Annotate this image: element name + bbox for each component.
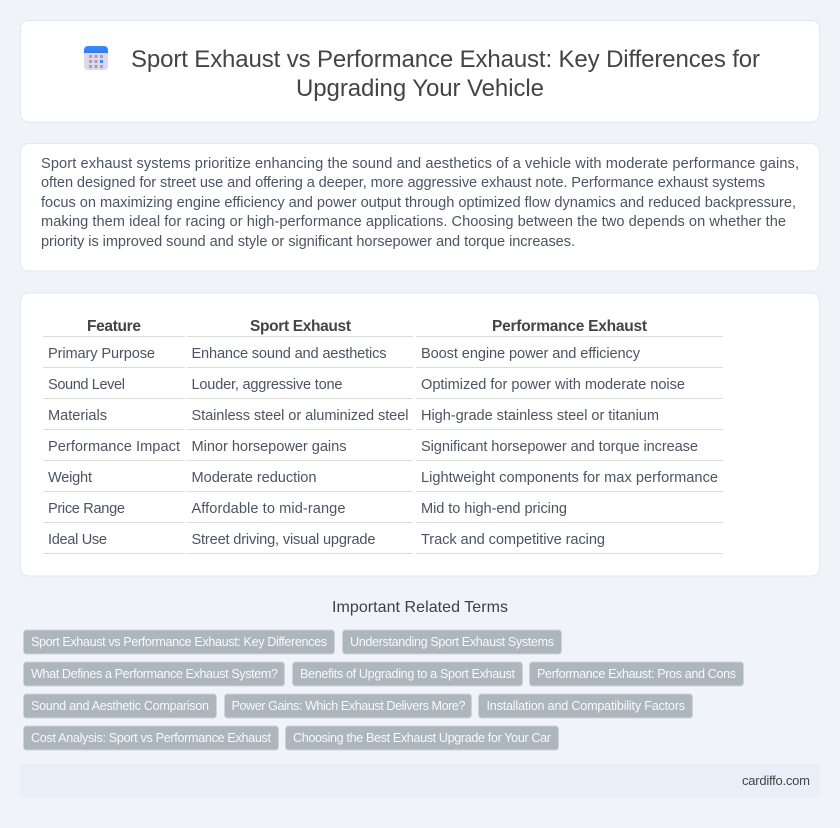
- chip: Choosing the Best Exhaust Upgrade for Your Car: [293, 731, 551, 745]
- row: performance impact: [48, 439, 698, 455]
- row: sound level: Louder, aggressive tone: [192, 377, 342, 393]
- row: sound level: Sound Level: [48, 377, 125, 393]
- row: materials: [48, 408, 659, 424]
- chip: Sound and Aesthetic Comparison: [31, 699, 209, 713]
- panel: comparison table: [20, 293, 820, 576]
- row: ideal use: Ideal Use: [48, 532, 107, 548]
- text block: description: focus on maximizing engine efficiency and power output through optimized flow dynamics and reduced backpressure,: [41, 195, 796, 211]
- chip: Sport Exhaust vs Performance Exhaust: Key Differences: [31, 635, 327, 649]
- row: weight: Lightweight components for max performance: [421, 470, 718, 486]
- chip: Power Gains: Which Exhaust Delivers More?: [232, 699, 466, 713]
- panel: related term chips: [24, 630, 744, 750]
- row: price range: [48, 501, 567, 517]
- row: performance impact: Minor horsepower gains: [192, 439, 346, 455]
- chip: [478, 694, 692, 718]
- row: ideal use: Street driving, visual upgrade: [192, 532, 376, 548]
- text block: description: Sport exhaust systems prioritize enhancing the sound and aesthetics of a vehicle with moderate performance gains,: [41, 156, 799, 172]
- row: materials: High-grade stainless steel or titanium: [421, 408, 659, 424]
- chip: Cost Analysis: Sport vs Performance Exhaust: [31, 731, 272, 745]
- row: price range: Mid to high-end pricing: [421, 501, 567, 517]
- row: primary purpose: Enhance sound and aesthetics: [192, 346, 386, 362]
- row: weight: Moderate reduction: [192, 470, 316, 486]
- table header: Feature: [87, 318, 141, 335]
- chip: [286, 726, 558, 750]
- heading: important related terms: Important Related Terms: [332, 599, 508, 616]
- table header: Sport Exhaust: [250, 318, 351, 335]
- chip: [224, 694, 472, 718]
- row: weight: Weight: [48, 470, 92, 486]
- footer: [20, 764, 820, 798]
- panel: description: [20, 144, 820, 271]
- footer source text: cardiffo.com: [742, 773, 810, 788]
- icon: calendar: [84, 46, 108, 70]
- table grid lines: [43, 336, 723, 554]
- row: sound level: Optimized for power with moderate noise: [421, 377, 685, 393]
- row: ideal use: [48, 532, 605, 548]
- chip: [24, 726, 278, 750]
- title: Sport Exhaust vs Performance Exhaust: Key Differences for: [131, 46, 760, 73]
- text block: description: priority is improved sound and style or significant horsepower and torque increases.: [41, 234, 575, 250]
- chip: [292, 662, 522, 686]
- chip: [24, 630, 334, 654]
- chip: Benefits of Upgrading to a Sport Exhaust: [300, 667, 516, 681]
- row: ideal use: Track and competitive racing: [421, 532, 605, 548]
- text block: description: often designed for street use and offering a deeper, more aggressive exhaust note. Performance exhaust systems: [41, 175, 765, 191]
- text block: description: making them ideal for racing or high-performance applications. Choosing between the two depends on whether the: [41, 214, 786, 230]
- chip: [24, 694, 216, 718]
- chip: Understanding Sport Exhaust Systems: [350, 635, 554, 649]
- row: primary purpose: [48, 346, 641, 362]
- table header: Performance Exhaust: [492, 318, 647, 335]
- row: weight: [48, 470, 718, 486]
- chip: Performance Exhaust: Pros and Cons: [537, 667, 736, 681]
- chip: [530, 662, 744, 686]
- row: primary purpose: Primary Purpose: [48, 346, 155, 362]
- row: sound level: [48, 377, 685, 393]
- row: performance impact: Performance Impact: [48, 439, 180, 455]
- title: Upgrading Your Vehicle: [296, 75, 544, 102]
- row: performance impact: Significant horsepower and torque increase: [421, 439, 698, 455]
- row: primary purpose: Boost engine power and efficiency: [421, 346, 641, 362]
- chip: What Defines a Performance Exhaust System?: [31, 667, 278, 681]
- chip: [24, 662, 284, 686]
- row: materials: Stainless steel or aluminized steel: [192, 408, 408, 424]
- row: materials: Materials: [48, 408, 107, 424]
- chip: Installation and Compatibility Factors: [486, 699, 685, 713]
- table header: [87, 318, 647, 335]
- row: price range: Price Range: [48, 501, 125, 517]
- row: price range: Affordable to mid-range: [192, 501, 346, 517]
- chip: [342, 630, 562, 654]
- panel: header: [20, 20, 820, 122]
